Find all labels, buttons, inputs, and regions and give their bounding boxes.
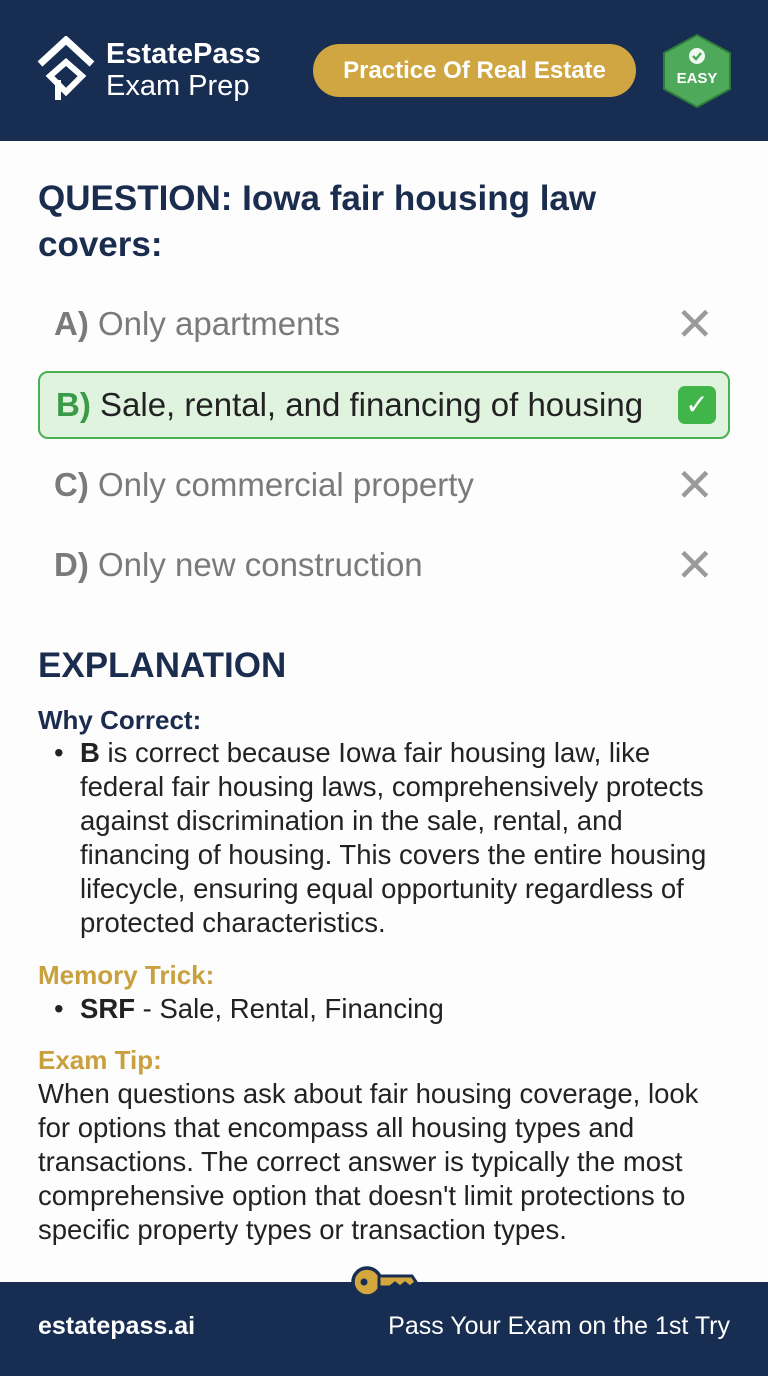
- option C: ✕: [675, 459, 714, 511]
- footer: [0, 1282, 768, 1376]
- option D: ✕: [675, 539, 714, 591]
- category pill: Practice Of Real Estate: [343, 57, 606, 84]
- memory trick: •: [54, 993, 64, 1024]
- footer url: estatepass.ai: [38, 1312, 195, 1340]
- category pill: [313, 44, 636, 97]
- exam tip: specific property types or transaction types.: [38, 1214, 567, 1245]
- question: [38, 179, 596, 264]
- exam tip: When questions ask about fair housing coverage, look: [38, 1078, 698, 1109]
- why correct: •: [54, 737, 64, 768]
- easy badge: [663, 34, 731, 108]
- why correct: B is correct because Iowa fair housing law, like: [80, 737, 650, 768]
- option A: ✕: [675, 298, 714, 350]
- why correct: protected characteristics.: [80, 907, 386, 938]
- exam tip: transactions. The correct answer is typically the most: [38, 1146, 682, 1177]
- why correct: Why Correct:: [38, 705, 201, 735]
- option A: A) Only apartments: [54, 305, 340, 342]
- easy badge: EASY: [677, 70, 717, 87]
- option D: D) Only new construction: [54, 546, 423, 583]
- option B correct: ✓: [685, 389, 709, 420]
- header: [0, 0, 768, 141]
- logo text: [106, 38, 261, 102]
- why correct: against discrimination in the sale, rental, and: [80, 805, 623, 836]
- option B correct: B) Sale, rental, and financing of housing: [56, 386, 643, 423]
- logo icon: [38, 36, 94, 100]
- exam tip: Exam Tip:: [38, 1045, 162, 1075]
- exam tip: comprehensive option that doesn't limit protections to: [38, 1180, 685, 1211]
- memory trick: Memory Trick:: [38, 960, 214, 990]
- explanation heading: EXPLANATION: [38, 646, 286, 685]
- question: QUESTION: Iowa fair housing law: [38, 179, 596, 218]
- memory trick: SRF - Sale, Rental, Financing: [80, 993, 444, 1024]
- option C: [54, 459, 714, 511]
- why correct: [38, 705, 706, 938]
- option A: [54, 298, 714, 350]
- icon: key: [351, 1266, 418, 1294]
- footer tagline: Pass Your Exam on the 1st Try: [388, 1312, 730, 1340]
- option D: [54, 539, 714, 591]
- logo text: EstatePass: [106, 38, 261, 70]
- logo text: Exam Prep: [106, 70, 249, 102]
- exam tip: [38, 1045, 698, 1245]
- option C: C) Only commercial property: [54, 466, 474, 503]
- why correct: lifecycle, ensuring equal opportunity regardless of: [80, 873, 684, 904]
- question: covers:: [38, 225, 163, 264]
- option B correct: [38, 371, 730, 439]
- memory trick: [38, 960, 444, 1024]
- why correct: federal fair housing laws, comprehensively protects: [80, 771, 704, 802]
- exam tip: for options that encompass all housing types and: [38, 1112, 634, 1143]
- why correct: financing of housing. This covers the entire housing: [80, 839, 706, 870]
